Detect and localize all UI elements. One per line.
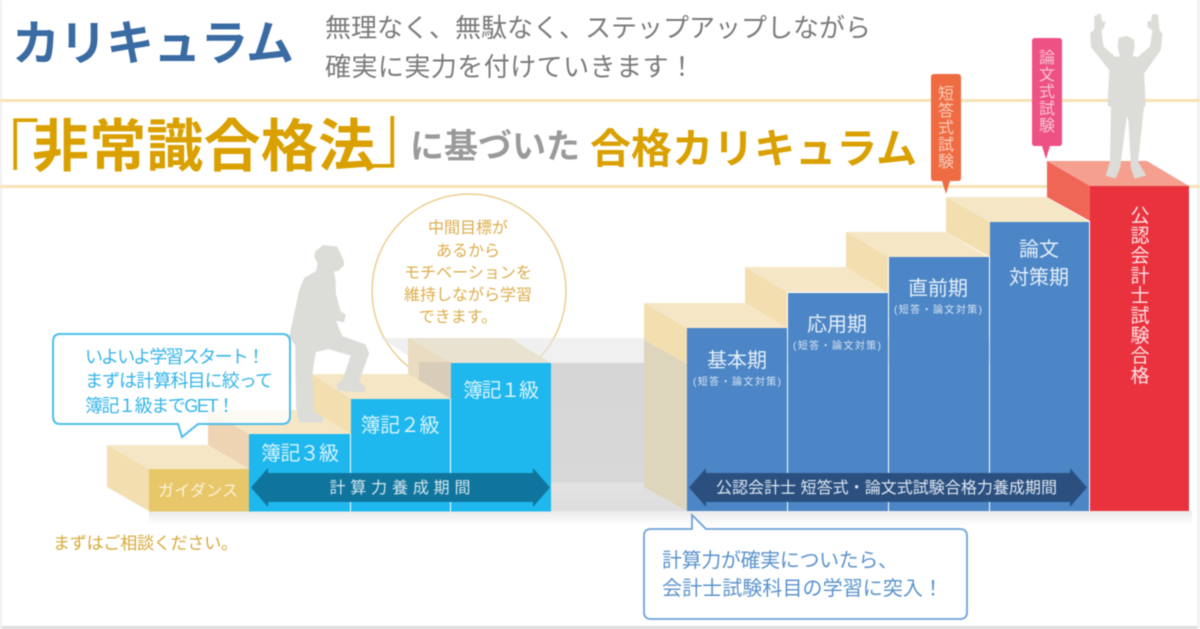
flag: essay exam: 論文式試験	[1039, 49, 1055, 135]
step: basic period	[687, 328, 787, 511]
step: final period	[889, 257, 989, 511]
figure: cheering person silhouette	[1091, 14, 1162, 178]
subtitle text: 確実に実力を付けていきます！	[325, 52, 695, 82]
main heading: 合格カリキュラム	[590, 126, 917, 172]
step: applied period: (短答・論文対策)	[793, 339, 881, 352]
callout: motivation circle: 維持しながら学習	[404, 286, 532, 304]
callout: move to accountant subjects: 会計士試験科目の学習に突入！	[662, 577, 943, 600]
step: bookkeeping grade 2	[351, 399, 450, 512]
step: essay period	[990, 222, 1089, 511]
callout: move to accountant subjects: 計算力が確実についたら、	[662, 549, 898, 572]
step: guidance	[149, 469, 249, 512]
step: bookkeeping grade 1	[451, 363, 551, 512]
main heading: に基づいた	[410, 128, 580, 166]
callout: move to accountant subjects	[644, 515, 967, 619]
step: final period: 直前期	[908, 277, 968, 300]
arrow: calculation training period: 計算力養成期間	[330, 478, 470, 497]
callout: motivation circle	[372, 194, 566, 388]
step: guidance: ガイダンス	[158, 482, 238, 500]
main heading	[0, 89, 917, 202]
callout: motivation circle: あるから	[436, 242, 500, 260]
step: bookkeeping grade 3	[249, 434, 350, 512]
flag: short answer exam: 短答式試験	[938, 85, 954, 171]
step: applied period	[788, 293, 888, 511]
subtitle text: 無理なく、無駄なく、ステップアップしながら	[325, 13, 871, 43]
arrow: calculation training period	[251, 468, 550, 507]
flag: short answer exam	[931, 74, 961, 194]
main heading: 非常識合格法	[32, 115, 375, 179]
callout: motivation circle: モチベーションを	[404, 264, 532, 282]
gap bridge between stages	[380, 338, 1000, 511]
step: essay period: 対策期	[1009, 266, 1069, 289]
note: consult first: まずはご相談ください。	[53, 534, 238, 553]
subtitle text	[325, 13, 871, 82]
step: bookkeeping grade 2: 簿記２級	[360, 414, 440, 437]
step: applied period: 応用期	[807, 313, 867, 336]
step: bookkeeping grade 1: 簿記１級	[463, 379, 539, 402]
callout: start of study	[53, 334, 290, 437]
step: exam pass red block	[1047, 161, 1189, 511]
callout: start of study: まずは計算科目に絞って	[85, 371, 273, 391]
step: final period: (短答・論文対策)	[894, 303, 982, 316]
step: bookkeeping grade 3: 簿記３級	[261, 442, 339, 465]
callout: start of study: 簿記１級までGET！	[85, 396, 235, 416]
step: basic period: (短答・論文対策)	[693, 375, 781, 388]
figure: climbing person silhouette	[290, 246, 368, 422]
title: カリキュラム	[12, 18, 294, 71]
step: basic period: 基本期	[707, 349, 767, 372]
floor shadow	[149, 511, 1192, 525]
staircase: accountant stage beige faces	[644, 197, 1089, 511]
callout: motivation circle: できます。	[419, 308, 497, 326]
main heading: 」	[367, 89, 446, 178]
arrow: accountant exam training period: 公認会計士 短答式・論文式試験合格力養成期間	[716, 479, 1057, 497]
callout: motivation circle: 中間目標が	[428, 219, 508, 237]
step: essay period: 論文	[1019, 238, 1059, 261]
callout: start of study: いよいよ学習スタート！	[85, 347, 265, 367]
arrow: accountant exam training period	[689, 468, 1087, 507]
flag: essay exam	[1032, 38, 1062, 159]
step: exam pass red block: 公認会計士試験合格	[1130, 205, 1150, 387]
staircase: calculation stage beige faces	[107, 338, 551, 511]
